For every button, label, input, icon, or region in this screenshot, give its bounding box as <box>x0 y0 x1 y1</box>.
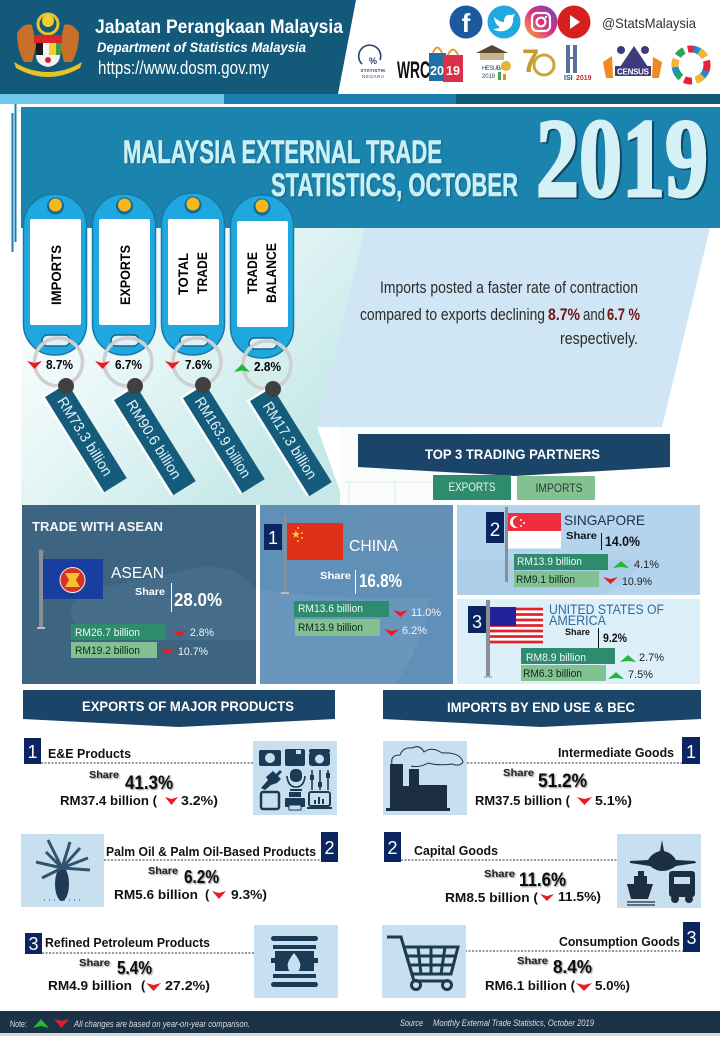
country name: SINGAPORE <box>564 512 645 528</box>
logo: sdg wheel <box>675 49 707 81</box>
icon: china flag: ★ <box>291 529 301 541</box>
tag: total trade: TRADE <box>195 252 210 294</box>
colour strip <box>0 94 720 104</box>
import item 1: intermediate goods: Share <box>503 768 534 779</box>
logo: hesuba: HESUBA <box>482 66 504 72</box>
logo: isi 2019: ISI <box>564 75 573 82</box>
tag: imports: 8.7% <box>46 357 73 372</box>
import item 2: capital goods: 11.5%) <box>558 889 601 904</box>
icon: asean flag <box>37 550 103 629</box>
import item 2: capital goods: 11.6% <box>519 870 566 891</box>
tag: exports: RM90.6 billion <box>122 397 184 482</box>
heading: imports by end use: IMPORTS BY END USE & BEC <box>447 699 635 715</box>
import item 2: capital goods: Capital Goods <box>414 844 498 858</box>
heading: top 3 trading partners <box>358 434 670 476</box>
export item 3: refined petroleum: 3 <box>28 934 39 954</box>
icon: shopping cart <box>382 925 466 998</box>
summary statement: and <box>583 305 605 324</box>
logo: census <box>603 46 662 78</box>
exports value: 2.7% <box>639 652 664 664</box>
rank: 3 <box>472 612 482 632</box>
imports value: 6.2% <box>402 625 427 637</box>
share figure: 28.0% <box>174 590 222 610</box>
header title: Jabatan Perangkaan Malaysia <box>95 17 343 38</box>
imports value: RM9.1 billion <box>516 574 575 586</box>
imports value <box>521 665 653 681</box>
export item 3: refined petroleum: Refined Petroleum Products <box>45 936 210 950</box>
export item 1: e&e: E&E Products <box>48 747 131 761</box>
legend: imports: IMPORTS <box>536 483 583 495</box>
header url: https://www.dosm.gov.my <box>98 58 269 78</box>
exports value <box>71 624 214 640</box>
note: All changes are based on year-on-year comparison. <box>73 1019 250 1030</box>
export item 2: palm oil: Share <box>148 866 178 877</box>
exports value: 4.1% <box>634 559 659 571</box>
tag: trade balance: 2.8% <box>254 359 281 374</box>
heading: exports of major products <box>23 690 335 727</box>
rank: 2 <box>490 520 500 541</box>
share figure: Share <box>566 530 597 542</box>
export item 2: palm oil: 2 <box>324 838 335 858</box>
share figure <box>135 583 222 612</box>
icon: twitter <box>488 6 520 38</box>
country name: AMERICA <box>549 613 606 628</box>
export item 2: palm oil: ( <box>205 887 210 902</box>
header subtitle: Department of Statistics Malaysia <box>97 40 306 55</box>
country name: ASEAN <box>111 565 164 582</box>
logo: hari statistik: STATISTIK <box>360 68 386 73</box>
imports value <box>514 571 652 588</box>
exports value: 11.0% <box>411 607 441 619</box>
source: Source <box>400 1018 423 1029</box>
tag: trade balance: BALANCE <box>264 243 279 303</box>
note: Note: <box>10 1019 27 1030</box>
tag: imports: RM73.3 billion <box>53 394 115 479</box>
side rules <box>12 104 16 252</box>
import item 1: intermediate goods: 51.2% <box>538 771 587 792</box>
import item 3: consumption goods: 3 <box>686 928 697 948</box>
share figure: Share <box>135 586 165 598</box>
logo: hesuba: 2019 <box>482 74 496 80</box>
social handle: @StatsMalaysia <box>602 15 696 31</box>
title band <box>21 107 720 228</box>
panel: usa <box>457 599 700 684</box>
export item 2: palm oil: 9.3%) <box>231 887 267 902</box>
panel heading: TRADE WITH ASEAN <box>32 520 163 534</box>
exports value: RM8.9 billion <box>526 652 586 664</box>
title: STATISTICS, OCTOBER <box>271 167 518 203</box>
icon: plane ship truck <box>617 834 701 908</box>
logo: hesuba <box>476 45 511 80</box>
icon: oil barrel <box>254 925 338 998</box>
export item 3: refined petroleum: ( <box>141 978 146 993</box>
logo: hari statistik: % <box>369 56 377 66</box>
imports value: 10.7% <box>178 646 208 658</box>
tag: exports: EXPORTS <box>118 245 133 305</box>
tag: trade balance: RM17.3 billion <box>259 399 320 483</box>
import item 3: consumption goods: 8.4% <box>553 957 592 977</box>
export item 1: e&e: RM37.4 billion ( <box>60 793 158 808</box>
export item 3: refined petroleum: 27.2%) <box>165 978 210 993</box>
country name: UNITED STATES OF <box>549 602 664 617</box>
share figure <box>565 627 627 648</box>
logo: wrc 2019: 20 <box>430 63 444 78</box>
imports value <box>71 642 208 658</box>
rank <box>264 524 282 550</box>
tag: exports <box>92 194 196 496</box>
exports value <box>514 554 659 571</box>
logo: hari statistik: NEGARA <box>362 74 384 79</box>
summary statement: respectively. <box>560 329 638 348</box>
imports value <box>295 619 427 637</box>
tag: imports <box>24 194 127 493</box>
panel: trade with asean <box>22 505 256 684</box>
title: MALAYSIA EXTERNAL TRADE <box>123 134 442 170</box>
imports value: RM6.3 billion <box>523 668 582 680</box>
import item 3: consumption goods: Consumption Goods <box>559 935 680 949</box>
tag: imports: IMPORTS <box>49 245 64 305</box>
export item 3: refined petroleum <box>25 925 338 998</box>
logo: isi 2019 <box>564 45 592 82</box>
exports value: 2.8% <box>190 627 214 639</box>
logo: wrc 2019: 19 <box>446 63 460 78</box>
import item 3: consumption goods: Share <box>517 956 548 967</box>
exports value: RM13.9 billion <box>517 556 582 568</box>
legend: exports <box>433 475 511 500</box>
icon: facebook: f <box>462 8 471 38</box>
tag: total trade: TOTAL <box>176 253 191 295</box>
country name <box>549 602 664 628</box>
rank <box>468 606 486 633</box>
legend: imports <box>517 476 595 500</box>
heading: top 3 trading partners: TOP 3 TRADING PARTNERS <box>425 446 600 462</box>
imports value: 7.5% <box>628 669 653 681</box>
import item 2: capital goods: Share <box>484 869 515 880</box>
logo: wrc 2019 <box>397 48 463 84</box>
share figure: 16.8% <box>359 571 402 591</box>
tag: trade balance: TRADE <box>245 252 260 294</box>
import item 3: consumption goods: RM6.1 billion ( <box>485 978 576 993</box>
export item 3: refined petroleum: 5.4% <box>117 958 152 978</box>
icon: palm tree <box>21 834 104 907</box>
tag: total trade <box>162 193 265 494</box>
icon: electronics grid <box>253 741 337 815</box>
icon: china flag <box>281 515 343 594</box>
source: Monthly External Trade Statistics, October 2019 <box>433 1018 595 1029</box>
legend: exports: EXPORTS <box>448 482 496 494</box>
share figure: Share <box>320 570 351 582</box>
icon: instagram <box>524 6 558 38</box>
header banner <box>0 0 720 94</box>
tag: trade balance <box>230 195 332 497</box>
tag: total trade: RM163.9 billion <box>191 394 254 481</box>
summary statement <box>360 278 640 348</box>
logo: hari statistik <box>359 45 386 79</box>
export item 2: palm oil: RM5.6 billion <box>114 887 198 902</box>
icon: facebook <box>450 6 482 38</box>
import item 2: capital goods: 2 <box>387 838 398 858</box>
icon: national crest <box>14 14 82 77</box>
export item 2: palm oil <box>21 832 338 907</box>
panel: singapore <box>457 505 700 595</box>
logo: wrc 2019: WRC <box>397 57 430 84</box>
export item 1: e&e: Share <box>89 770 119 781</box>
logo: isi 2019: 2019 <box>576 75 592 82</box>
heading: exports of major products: EXPORTS OF MAJOR PRODUCTS <box>82 698 294 714</box>
summary statement: 6.7 % <box>607 305 640 324</box>
country name: CHINA <box>349 538 398 555</box>
import item 2: capital goods: RM8.5 billion ( <box>445 890 539 905</box>
source <box>400 1018 595 1029</box>
summary statement: Imports posted a faster rate of contraction <box>380 278 638 297</box>
import item 1: intermediate goods <box>383 737 700 815</box>
icon: factory <box>383 741 467 815</box>
tag: total trade: 7.6% <box>185 357 212 372</box>
import item 3: consumption goods: 5.0%) <box>595 978 630 993</box>
imports value: RM13.9 billion <box>298 622 363 634</box>
panel: china <box>260 505 453 684</box>
import item 1: intermediate goods: 1 <box>686 742 696 762</box>
exports value <box>294 601 441 619</box>
export item 3: refined petroleum: RM4.9 billion <box>48 978 132 993</box>
import item 2: capital goods <box>384 832 701 908</box>
icon: youtube <box>558 6 590 38</box>
icon: usa flag <box>484 600 543 678</box>
exports value: RM13.6 billion <box>298 603 363 615</box>
export item 1: e&e: 1 <box>27 742 38 762</box>
logo: 70 years <box>522 43 554 79</box>
import item 3: consumption goods <box>382 922 700 998</box>
export item 1: e&e: 3.2%) <box>181 793 218 808</box>
summary statement: 8.7% <box>548 305 580 324</box>
share figure: 14.0% <box>605 533 640 549</box>
export item 2: palm oil: Palm Oil & Palm Oil-Based Products <box>106 845 316 859</box>
rank <box>486 512 504 543</box>
share figure <box>320 570 402 594</box>
tag: exports: 6.7% <box>115 357 142 372</box>
title <box>123 134 518 203</box>
logo: 70 years: 7 <box>522 43 539 79</box>
share figure: Share <box>565 627 590 638</box>
imports value: 10.9% <box>622 576 652 588</box>
import item 1: intermediate goods: Intermediate Goods <box>558 746 674 760</box>
summary background <box>0 228 710 505</box>
icon: singapore flag <box>505 507 561 582</box>
note <box>10 1019 250 1030</box>
exports value <box>521 648 664 664</box>
export item 1: e&e <box>24 738 337 815</box>
import item 1: intermediate goods: RM37.5 billion ( <box>475 793 571 808</box>
share figure <box>566 530 640 550</box>
heading: imports by end use <box>383 690 701 727</box>
footer bar <box>0 1011 720 1036</box>
share figure: 9.2% <box>603 631 627 645</box>
logo: census: CENSUS <box>617 68 650 76</box>
exports value: RM26.7 billion <box>75 627 140 639</box>
imports value: RM19.2 billion <box>75 645 140 657</box>
summary statement: compared to exports declining <box>360 305 545 324</box>
export item 1: e&e: 41.3% <box>125 773 173 794</box>
import item 1: intermediate goods: 5.1%) <box>595 793 632 808</box>
export item 2: palm oil: 6.2% <box>184 867 219 887</box>
rank: 1 <box>268 528 278 548</box>
export item 3: refined petroleum: Share <box>79 958 110 969</box>
